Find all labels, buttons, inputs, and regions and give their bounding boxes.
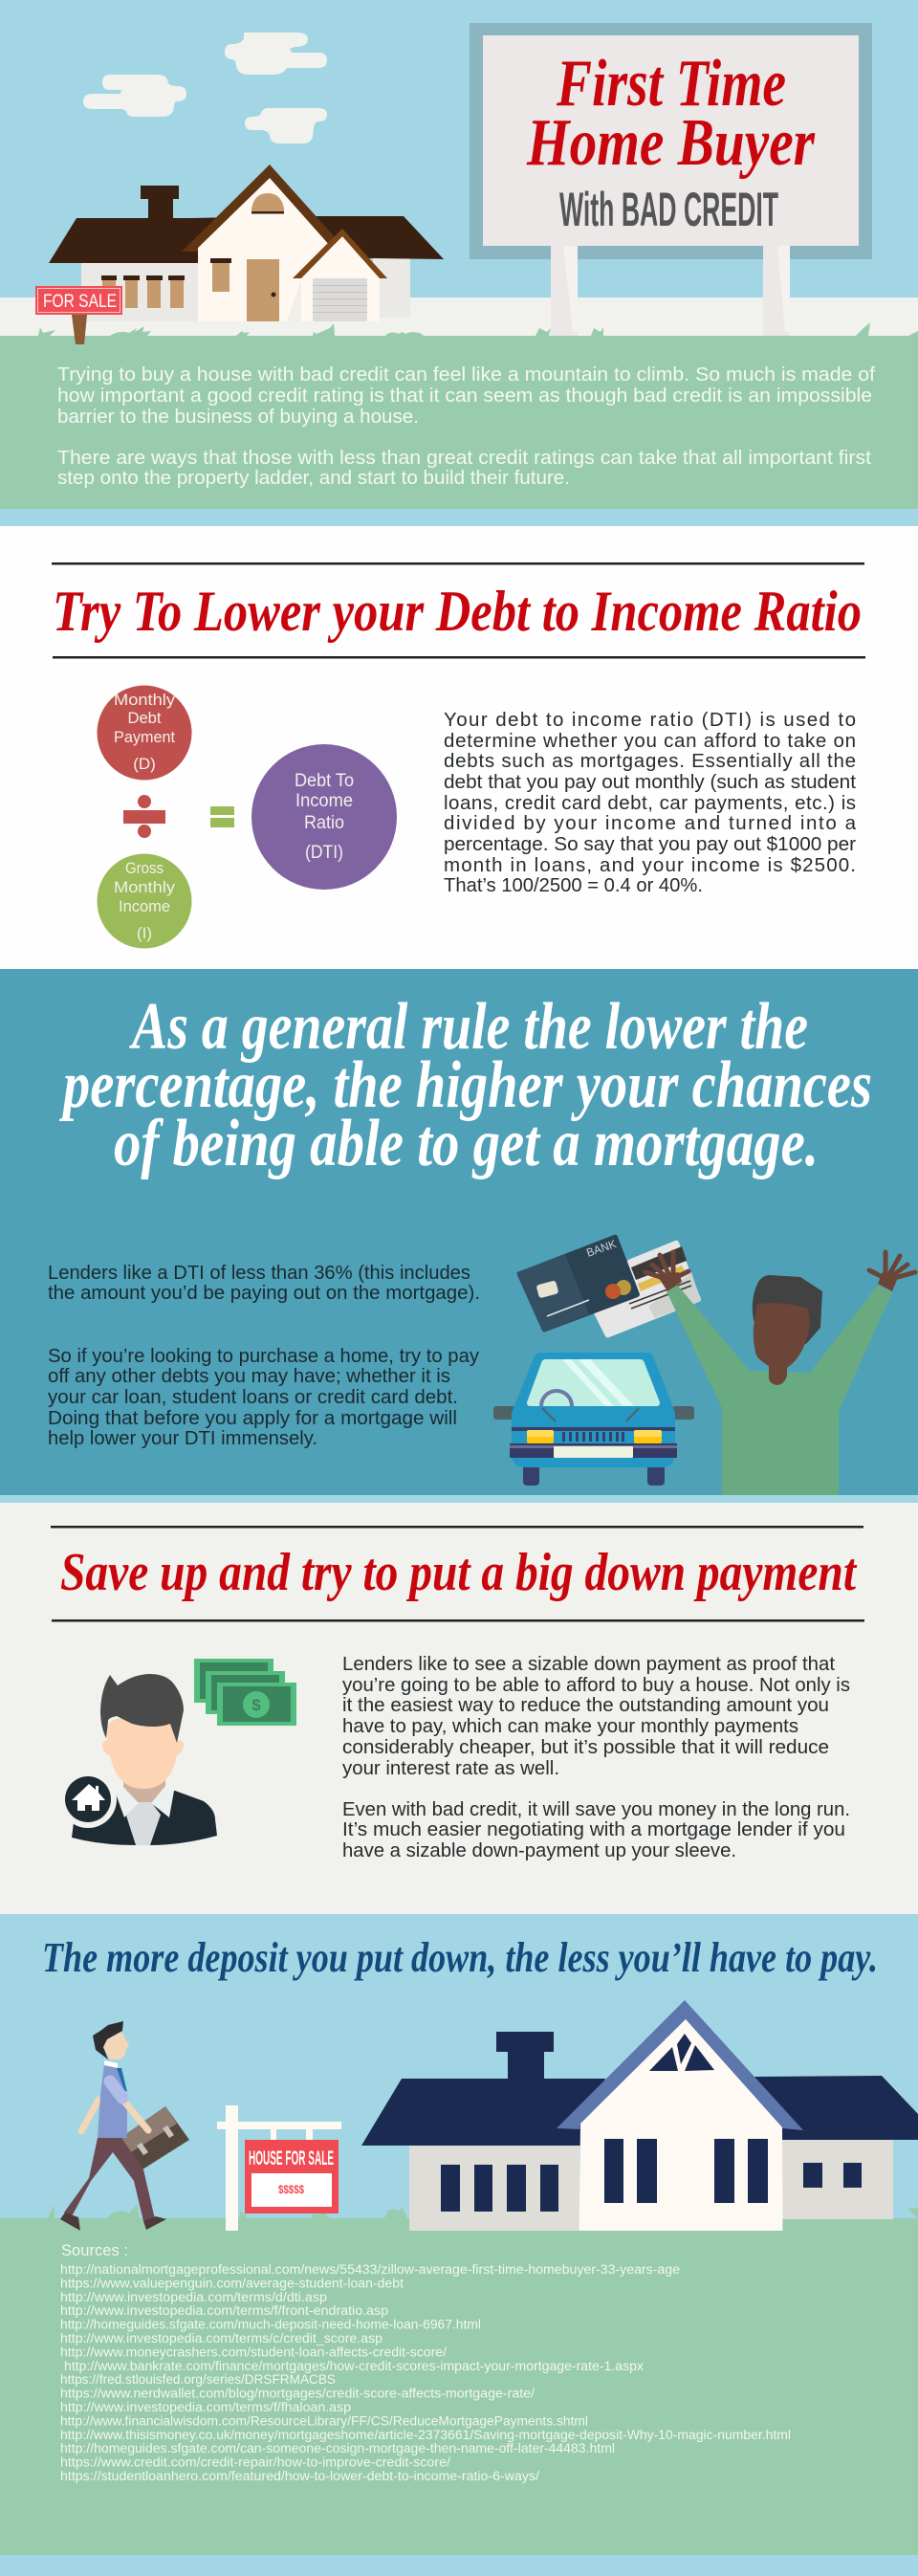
down payment text: It’s much easier negotiating with a mortgage lender if you <box>342 1818 845 1840</box>
lender advice text <box>48 1262 480 1449</box>
panel: teal general rule section <box>0 969 918 1496</box>
callout heading <box>59 990 872 1180</box>
sources list: http://www.investopedia.com/terms/d/dti.asp <box>60 2290 327 2304</box>
clouds <box>83 33 327 143</box>
intro text: Trying to buy a house with bad credit can feel like a mountain to climb. So much is made of <box>57 363 875 385</box>
icon: credit cards: BANK <box>584 1237 618 1260</box>
illustration: businessman with home badge <box>59 1674 217 1845</box>
DTI explanation text: debts such as mortgages. Essentially all the <box>444 750 856 772</box>
lender advice text: Lenders like a DTI of less than 36% (this includes <box>48 1262 470 1284</box>
main title: First Time <box>556 47 786 121</box>
down payment text: have a sizable down-payment up your sleeve. <box>342 1839 736 1861</box>
sources list: https://www.nerdwallet.com/blog/mortgages/credit-score-affects-mortgage-rate/ <box>60 2387 535 2401</box>
illustration: navy house <box>361 2000 918 2231</box>
lender advice text: the amount you’d be paying out on the mortgage). <box>48 1282 480 1304</box>
down payment text: you’re going to be able to afford to buy a house. Not only is <box>342 1674 850 1696</box>
circle: debt to income ratio: Ratio <box>304 813 344 833</box>
down payment text <box>342 1653 850 1861</box>
DTI formula diagram <box>98 685 397 949</box>
DTI explanation text: loans, credit card debt, car payments, etc.) is <box>444 792 856 814</box>
for sale sign <box>35 286 122 344</box>
house for sale sign <box>217 2105 341 2231</box>
down payment text: your interest rate as well. <box>342 1757 559 1779</box>
circle: gross monthly income: Monthly <box>114 878 176 896</box>
equals sign <box>210 806 234 827</box>
billboard <box>470 23 872 344</box>
DTI explanation text: Your debt to income ratio (DTI) is used to <box>444 709 856 731</box>
sources list: http://nationalmortgageprofessional.com/news/55433/zillow-average-first-time-homebuyer-33-years-age <box>60 2262 680 2277</box>
lender advice text: So if you’re looking to purchase a home, try to pay <box>48 1345 480 1367</box>
sources list: http://homeguides.sfgate.com/can-someone-cosign-mortgage-then-name-off-later-44483.html <box>60 2441 615 2455</box>
panel: hero green ground <box>0 336 918 509</box>
sources list <box>60 2241 791 2483</box>
circle: debt to income ratio <box>251 744 397 890</box>
illustration: blue car <box>493 1353 694 1486</box>
circle: monthly debt payment: (D) <box>133 755 156 773</box>
panel: down payment section <box>0 1503 918 1914</box>
billboard frame <box>470 23 872 259</box>
billboard posts <box>551 246 790 344</box>
divide sign <box>123 795 165 838</box>
panel: hero sky <box>0 0 918 526</box>
intro text: how important a good credit rating is that it can seem as though bad credit is an impossible <box>57 385 872 407</box>
sources list: http://www.investopedia.com/terms/c/credit_score.asp <box>60 2331 382 2345</box>
house for sale sign: $$$$$ <box>278 2185 305 2196</box>
grass tufts <box>38 322 918 336</box>
circle: debt to income ratio: Debt To <box>295 771 354 791</box>
sources list: https://www.valuepenguin.com/average-student-loan-debt <box>60 2276 404 2290</box>
icon: banknotes: $ <box>251 1696 261 1714</box>
main title <box>526 47 816 236</box>
sources list: http://www.investopedia.com/terms/f/front-endratio.asp <box>60 2303 388 2318</box>
lender advice text: off any other debts you may have; whether it is <box>48 1365 450 1387</box>
down payment text: Even with bad credit, it will save you money in the long run. <box>342 1798 850 1820</box>
circle: gross monthly income: Income <box>119 897 170 915</box>
white horizon band <box>0 297 918 338</box>
panel: deposit section sky <box>0 1914 918 2220</box>
sources list: https://studentloanhero.com/featured/how-to-lower-debt-to-income-ratio-6-ways/ <box>60 2469 539 2483</box>
circle: monthly debt payment: Monthly <box>114 691 176 709</box>
icon: credit cards <box>516 1235 701 1337</box>
down payment text: Lenders like to see a sizable down payment as proof that <box>342 1653 835 1675</box>
DTI explanation text: percentage. So say that you pay out $1000 per <box>444 833 856 855</box>
down payment text: it the easiest way to reduce the outstanding amount you <box>342 1694 829 1716</box>
sources list: Sources : <box>61 2241 128 2259</box>
illustration: walking man with briefcase <box>60 2021 189 2231</box>
billboard face <box>483 35 859 246</box>
grass tufts <box>48 2204 918 2218</box>
DTI explanation text: month in loans, and your income is $2500. <box>444 854 856 876</box>
footer sky strip <box>0 2555 918 2576</box>
illustration: brown house <box>49 165 444 321</box>
lender advice text: your car loan, student loans or credit card debt. <box>48 1386 458 1408</box>
sources list: http://www.thisismoney.co.uk/money/mortgageshome/article-2373661/Saving-mortgage-deposit-Why-10-magic-number.html <box>60 2428 791 2442</box>
home badge <box>59 1771 117 1828</box>
sources list: http://www.bankrate.com/finance/mortgages/how-credit-scores-impact-your-mortgage-rate-1.aspx <box>64 2359 644 2373</box>
sources list: https://www.credit.com/credit-repair/how-to-improve-credit-score/ <box>60 2455 450 2470</box>
sources list: http://www.investopedia.com/terms/f/fhaloan.asp <box>60 2400 351 2414</box>
for sale sign: FOR SALE <box>43 291 117 312</box>
circle: gross monthly income <box>98 853 191 949</box>
house for sale sign: HOUSE FOR SALE <box>249 2147 334 2169</box>
sources list: http://www.moneycrashers.com/student-loan-affects-credit-score/ <box>60 2345 447 2359</box>
sources list: http://www.financialwisdom.com/ResourceLibrary/FF/CS/ReduceMortgagePayments.shtml <box>60 2413 588 2428</box>
circle: monthly debt payment <box>98 685 191 781</box>
circle: monthly debt payment: Debt <box>128 709 162 727</box>
DTI explanation text: determine whether you can afford to take on <box>444 730 856 752</box>
intro text: There are ways that those with less than great credit ratings can take that all important first <box>57 447 871 469</box>
DTI explanation text: That’s 100/2500 = 0.4 or 40%. <box>444 874 703 896</box>
main title: Home Buyer <box>526 106 816 180</box>
DTI explanation text <box>444 709 857 896</box>
intro text: step onto the property ladder, and start to build their future. <box>57 467 570 489</box>
DTI explanation text: debt that you pay out monthly (such as student <box>444 771 856 793</box>
intro text <box>57 363 875 489</box>
lender advice text: Doing that before you apply for a mortgage will <box>48 1407 457 1429</box>
icon: banknotes <box>194 1659 296 1726</box>
divider strip <box>0 1495 918 1503</box>
intro text: barrier to the business of buying a house. <box>57 406 419 428</box>
sources list: https://fred.stlouisfed.org/series/DRSFRMACBS <box>60 2372 336 2387</box>
down payment text: have to pay, which can make your monthly payments <box>342 1715 798 1737</box>
circle: gross monthly income: Gross <box>125 859 164 877</box>
circle: debt to income ratio: Income <box>295 791 353 811</box>
lender advice text: help lower your DTI immensely. <box>48 1427 317 1449</box>
panel: sources green ground <box>0 2218 918 2555</box>
circle: gross monthly income: (I) <box>137 924 152 942</box>
circle: debt to income ratio: (DTI) <box>305 843 343 863</box>
down payment text: considerably cheaper, but it’s possible that it will reduce <box>342 1736 829 1758</box>
sources list: http://homeguides.sfgate.com/much-deposit-need-home-loan-6967.html <box>60 2318 481 2332</box>
panel: debt to income section <box>0 526 918 969</box>
circle: monthly debt payment: Payment <box>114 728 175 746</box>
DTI explanation text: divided by your income and turned into a <box>444 812 857 834</box>
illustration: cheering person <box>645 1252 915 1495</box>
